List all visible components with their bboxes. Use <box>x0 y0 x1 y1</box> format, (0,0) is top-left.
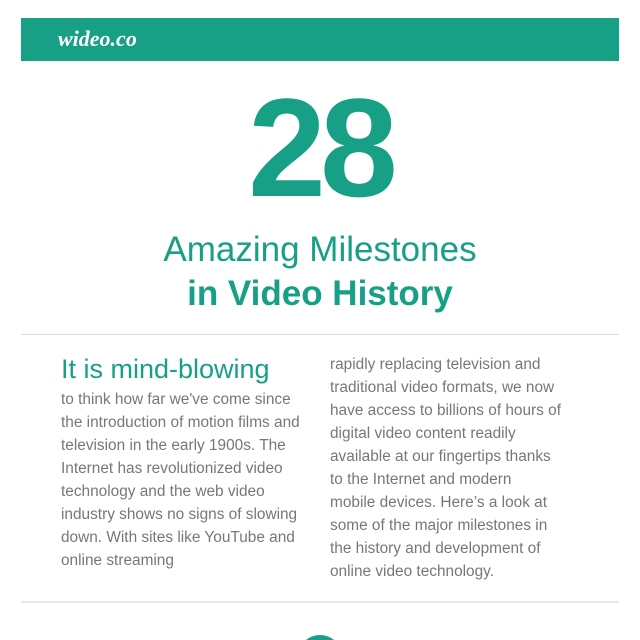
right text block: online video technology. <box>330 563 494 580</box>
left text block: Internet has revolutionized video <box>61 460 283 477</box>
right text block: digital video content readily <box>330 425 516 442</box>
right text block: traditional video formats, we now <box>330 379 554 396</box>
header banner <box>21 18 619 61</box>
right text block: some of the major milestones in <box>330 517 547 534</box>
left text block <box>61 354 300 569</box>
right text block: to the Internet and modern <box>330 471 511 488</box>
right text block: mobile devices. Here’s a look at <box>330 494 547 511</box>
title: Amazing Milestones <box>163 230 477 269</box>
logo: wideo.co <box>58 26 137 51</box>
left text block: technology and the web video <box>61 483 265 500</box>
right text block: the history and development of <box>330 540 540 557</box>
big number: 28 <box>248 69 392 226</box>
right text block: available at our fingertips thanks <box>330 448 551 465</box>
left text block: the introduction of motion films and <box>61 414 300 431</box>
title: in Video History <box>187 274 453 313</box>
left text block: industry shows no signs of slowing <box>61 506 297 523</box>
icon: circle <box>306 635 334 640</box>
heading: It is mind-blowing <box>61 354 270 384</box>
left text block: online streaming <box>61 552 174 569</box>
right text block: rapidly replacing television and <box>330 356 540 373</box>
title <box>163 230 477 313</box>
left text block: down. With sites like YouTube and <box>61 529 295 546</box>
right text block <box>330 356 562 580</box>
left text block: to think how far we've come since <box>61 391 291 408</box>
right text block: have access to billions of hours of <box>330 402 561 419</box>
left text block: television in the early 1900s. The <box>61 437 286 454</box>
